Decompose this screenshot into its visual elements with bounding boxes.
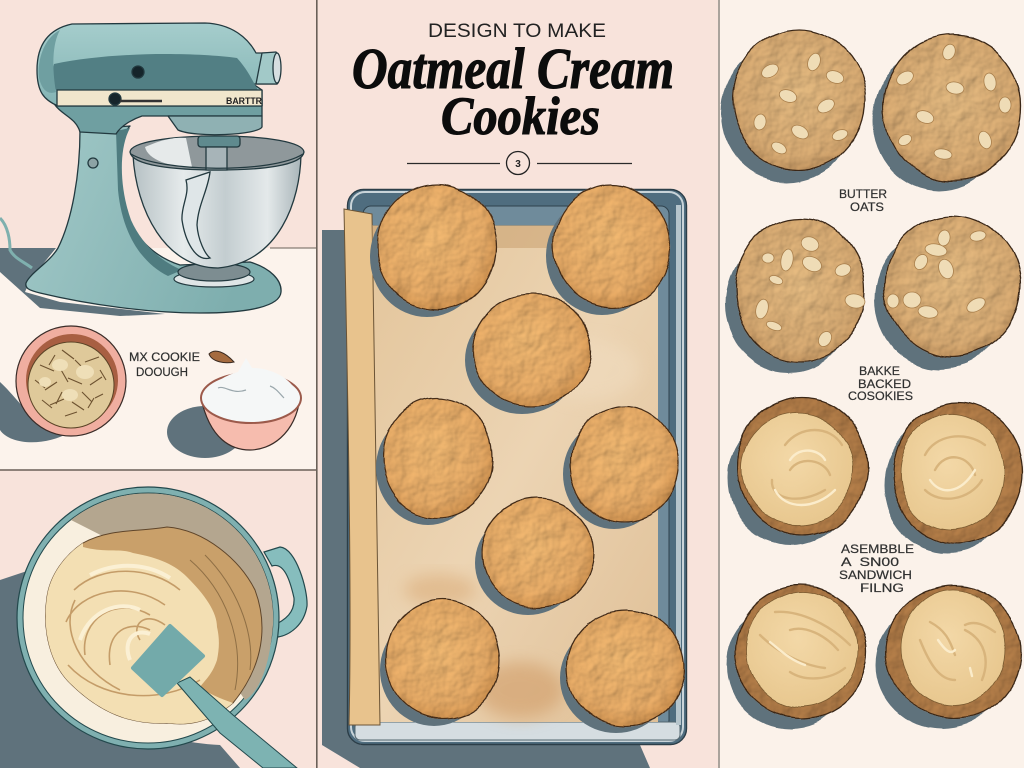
- panel: mixer: [0, 0, 316, 470]
- panel: dough bowl: [0, 470, 316, 768]
- hub: [256, 52, 280, 84]
- label: butter oats: BUTTER: [839, 189, 887, 201]
- dough swirl: [66, 571, 200, 696]
- filling swirls: [760, 430, 995, 680]
- head button: [132, 66, 144, 78]
- title: [352, 36, 674, 146]
- bowl shadow left: [0, 382, 70, 442]
- title: Oatmeal Cream: [352, 36, 674, 101]
- panel: ingredient bowls: [0, 326, 301, 458]
- oats bowl: [16, 326, 126, 436]
- icon: power cord: [0, 218, 32, 268]
- bowl handle: [264, 547, 307, 637]
- head: [37, 23, 280, 106]
- label: baked cookies: COSOKIES: [848, 391, 913, 403]
- big bowl: [17, 487, 279, 749]
- cream bowl shadow: [167, 406, 243, 458]
- neck: [55, 100, 262, 134]
- label: assemble sandwich filling: [839, 544, 914, 595]
- label: baked cookies: BACKED: [858, 379, 911, 391]
- label: assemble sandwich filling: SANDWICH: [839, 570, 912, 582]
- dough: [46, 527, 262, 724]
- label: mix cookie dough: DOOUGH: [136, 367, 188, 379]
- baked cookies: [377, 184, 685, 726]
- cream bowl: [201, 358, 301, 450]
- speed band: [57, 90, 262, 106]
- speed knob: [109, 93, 121, 105]
- title: Cookies: [441, 86, 600, 146]
- head lower shade: [52, 54, 258, 90]
- label: butter oats: [839, 189, 887, 214]
- bowl interior: [130, 136, 304, 170]
- label: assemble sandwich filling: FILNG: [860, 583, 904, 595]
- panel: cookie steps: [720, 0, 1024, 768]
- bowl foot: [174, 263, 254, 287]
- cream filling: [742, 413, 1005, 708]
- spatula: [133, 626, 297, 768]
- cookie shadows: [370, 197, 672, 733]
- almond: [209, 351, 234, 363]
- beater collar: [198, 136, 240, 147]
- bowl shaded inner: [71, 493, 273, 700]
- label: mix cookie dough: [129, 352, 200, 379]
- label: assemble sandwich filling: A SN00: [841, 557, 899, 569]
- mixer shadow: [0, 248, 165, 316]
- hub cap: [273, 53, 281, 83]
- tray: [348, 190, 686, 744]
- shadows: [721, 43, 1010, 729]
- stand mixer: [26, 23, 281, 313]
- mixing bowl: [130, 136, 304, 268]
- dough hook: [182, 172, 210, 258]
- beater hub: [168, 116, 262, 135]
- label: mix cookie dough: MX COOKIE: [129, 352, 200, 364]
- divider with step number: [407, 152, 632, 174]
- label: butter oats: OATS: [850, 202, 884, 214]
- column shade: [116, 128, 182, 276]
- bowl shadow: [0, 570, 240, 768]
- label: baked cookies: BAKKE: [859, 366, 900, 378]
- divider with step number: 3: [515, 159, 521, 170]
- parchment paper: [344, 209, 658, 725]
- oat cookies: [732, 29, 1021, 362]
- label: assemble sandwich filling: ASEMBBLE: [841, 544, 914, 556]
- cookie bases for filling: [735, 398, 1023, 718]
- tray shadow: [322, 230, 650, 768]
- panel: baking tray: [316, 0, 720, 768]
- band label: BARTTR: [226, 96, 262, 106]
- label: baked cookies: [848, 366, 913, 403]
- heading: design to make: DESIGN TO MAKE: [428, 21, 606, 42]
- mixer base and column: [26, 126, 281, 313]
- oat flakes: [753, 42, 1011, 349]
- screw: [88, 158, 98, 168]
- head back shade: [39, 30, 60, 93]
